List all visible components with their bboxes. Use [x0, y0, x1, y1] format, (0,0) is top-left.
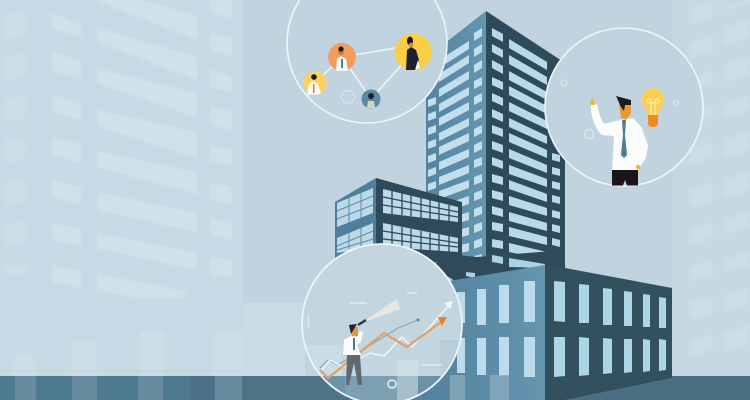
circle ground reflection — [322, 340, 459, 400]
figure: man with telescope — [343, 320, 366, 385]
circle: vision and growth — [302, 244, 462, 400]
low-rise right windows — [554, 281, 666, 377]
tower left face — [426, 11, 486, 270]
low-rise roof windows — [466, 255, 545, 278]
ghost building: right — [672, 0, 750, 376]
ghost building: left — [0, 0, 305, 376]
node: large yellow person — [394, 34, 432, 70]
orange trend arrow — [320, 317, 447, 378]
tower right face — [486, 11, 565, 270]
low-rise left face — [390, 265, 545, 400]
white trend arrow — [322, 301, 453, 370]
figure: man with raised hand — [590, 96, 648, 186]
mid-rise building — [335, 178, 462, 262]
ground strip — [0, 376, 750, 400]
network links — [315, 45, 413, 99]
tower left face windows — [428, 28, 482, 264]
node: blue person — [362, 90, 380, 108]
circle outline — [302, 244, 462, 400]
spotlight beam — [366, 299, 400, 321]
node: orange person — [328, 43, 356, 71]
hexagon outline — [341, 91, 355, 103]
low-rise right face — [545, 265, 672, 400]
mid-rise windows — [337, 188, 458, 253]
tower right face windows — [492, 28, 560, 274]
low-rise left windows — [457, 281, 535, 377]
node: small yellow person — [304, 72, 326, 95]
small white accents — [308, 293, 442, 388]
circle: team network — [287, 0, 447, 123]
grey trend line — [320, 320, 418, 368]
low-rise roof — [437, 250, 565, 281]
icon: light bulb — [642, 88, 664, 127]
low-rise base shading — [566, 378, 672, 400]
tower: tall office building — [426, 11, 565, 274]
circle: idea person — [545, 28, 703, 186]
small blue marker — [416, 318, 420, 322]
small ring decorations — [561, 80, 678, 138]
low-rise front building — [390, 250, 672, 400]
mid-rise left face — [335, 178, 376, 262]
mid-rise right face — [376, 178, 462, 262]
